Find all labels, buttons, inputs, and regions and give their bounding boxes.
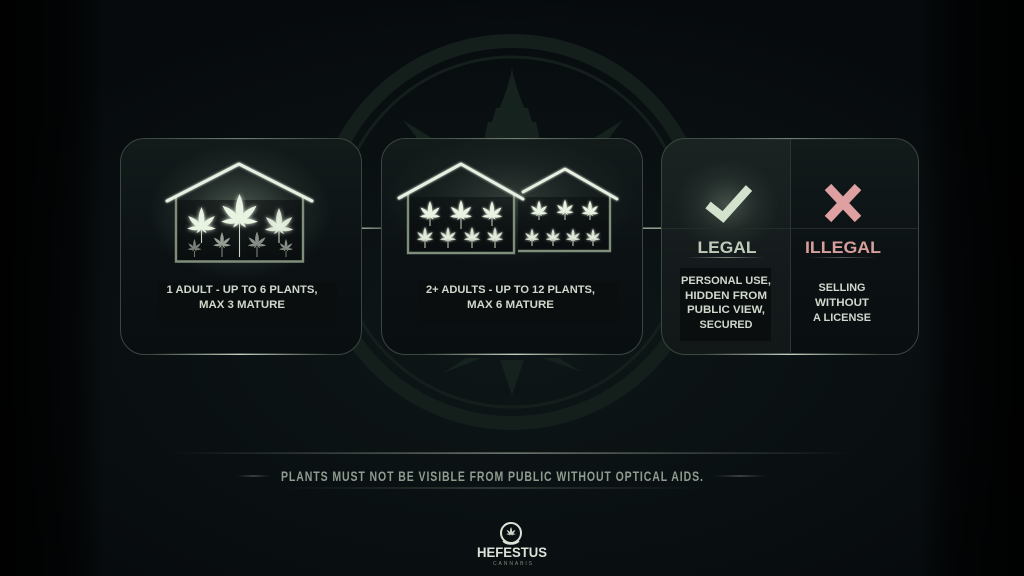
illegal heading: ILLEGAL — [805, 238, 881, 257]
text: two or more adults rule: 2+ ADULTS - UP TO 12 PLANTS, — [426, 284, 595, 296]
footer divider — [170, 452, 854, 454]
background medallion with leaf — [321, 41, 703, 423]
brand name: HEFESTUS — [477, 545, 547, 560]
legal heading: LEGAL — [698, 238, 756, 257]
text: one adult rule: 1 ADULT - UP TO 6 PLANTS, — [166, 284, 318, 296]
icon: logo emblem — [501, 523, 521, 544]
legal text: HIDDEN FROM — [685, 290, 767, 302]
text: one adult rule: MAX 3 MATURE — [199, 299, 285, 311]
icon: cross mark — [828, 187, 858, 219]
icon: check mark — [708, 188, 749, 217]
icon: house with six plants — [167, 164, 312, 262]
footer note: PLANTS MUST NOT BE VISIBLE FROM PUBLIC WITHOUT OPTICAL AIDS. — [281, 469, 703, 484]
logo — [477, 523, 547, 567]
panel: legal and illegal — [662, 138, 918, 355]
illegal column — [805, 187, 881, 324]
icon: large house — [399, 164, 523, 253]
illegal text: WITHOUT — [815, 297, 869, 309]
text: two or more adults rule — [426, 284, 595, 311]
text: one adult rule — [166, 284, 318, 311]
illegal text: A LICENSE — [813, 312, 871, 324]
legal text — [681, 275, 771, 331]
illegal text — [813, 282, 871, 324]
icon: small house — [518, 169, 617, 251]
panel: one adult — [120, 138, 362, 355]
connector lines between cards — [361, 228, 662, 229]
legal text: PUBLIC VIEW, — [687, 304, 765, 316]
panel: two or more adults — [382, 134, 642, 355]
legal text: PERSONAL USE, — [681, 275, 771, 287]
legal column — [680, 188, 771, 341]
text: two or more adults rule: MAX 6 MATURE — [467, 299, 554, 311]
illegal text: SELLING — [818, 282, 866, 294]
brand subtitle: CANNABIS — [493, 561, 533, 567]
legal text: SECURED — [700, 319, 753, 331]
